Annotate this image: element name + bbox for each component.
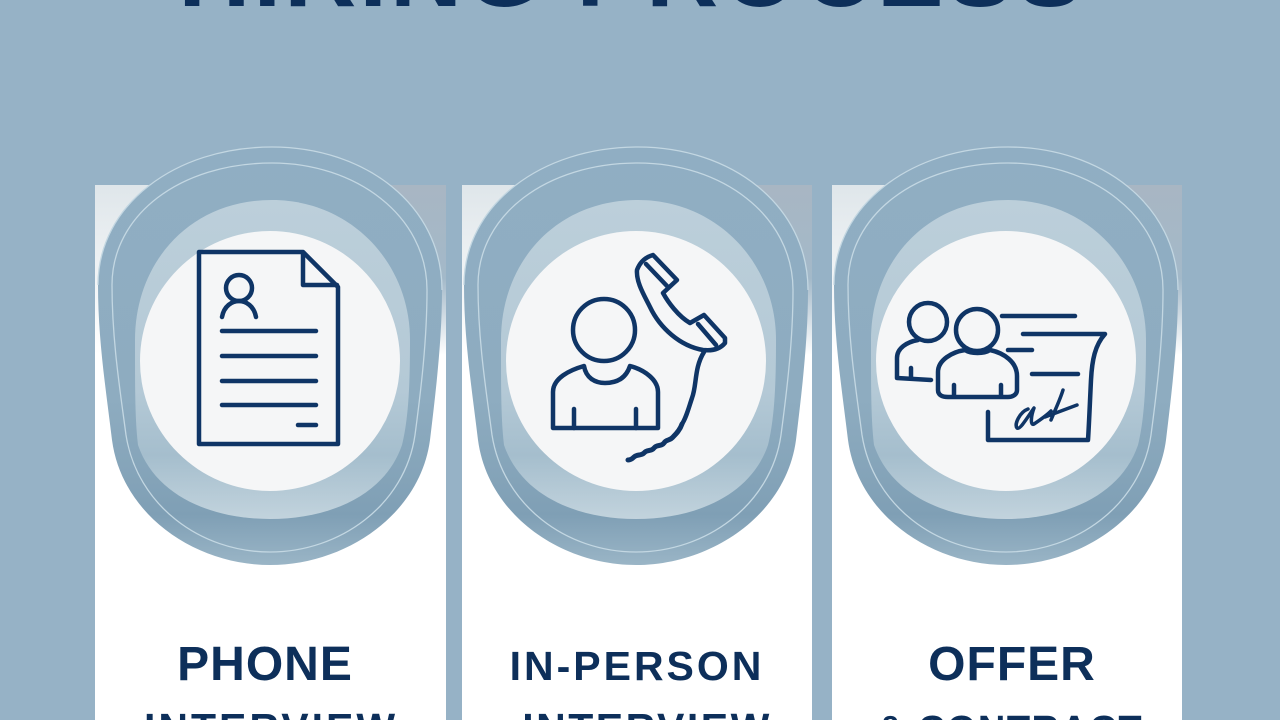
panel: phone interview: [95, 147, 446, 720]
label: offer and contract: [877, 638, 1143, 720]
badge: [464, 147, 808, 565]
card background: [832, 185, 1182, 720]
label: in-person interview: IN-PERSON: [510, 643, 764, 689]
icon: people and signed contract: [897, 303, 1105, 440]
icon: resume document: [199, 252, 338, 444]
label: phone interview: [144, 638, 398, 720]
badge: [98, 147, 442, 565]
badge: [834, 147, 1178, 565]
label: in-person interview: [510, 643, 772, 720]
card background: [95, 185, 446, 720]
card background: [462, 185, 812, 720]
label: phone interview: PHONE: [177, 638, 353, 691]
label: offer and contract: OFFER: [928, 638, 1096, 691]
panel: in-person interview: [462, 147, 812, 720]
icon: person with telephone: [553, 255, 725, 460]
panel: offer and contract: [832, 147, 1182, 720]
